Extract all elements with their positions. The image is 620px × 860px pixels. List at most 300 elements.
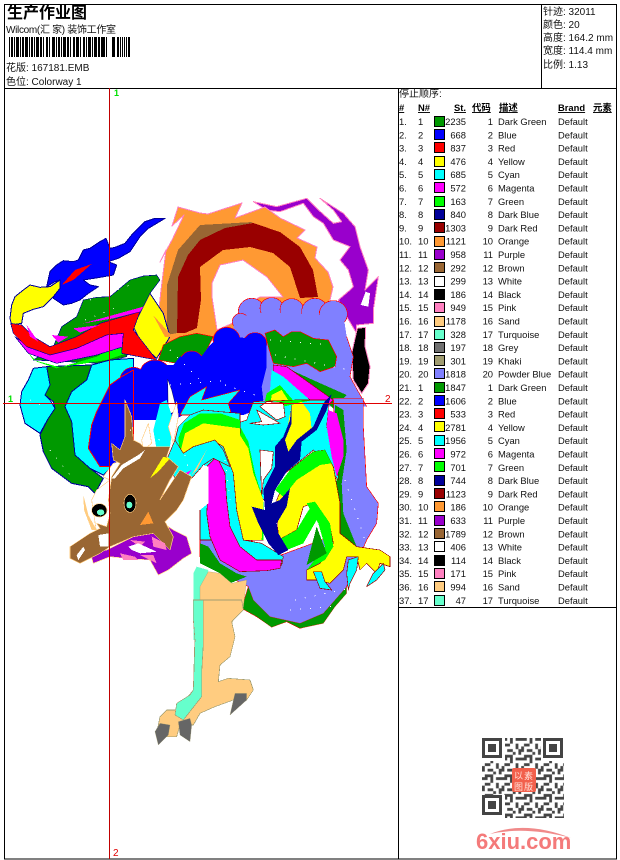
row 20: 20. <box>399 369 412 380</box>
row 31: 633 <box>450 515 466 526</box>
row 33: 406 <box>450 542 466 553</box>
row 5: 5. <box>399 169 407 180</box>
row 3: 3. <box>399 143 407 154</box>
row 8: 840 <box>450 209 466 220</box>
row 4 <box>399 156 588 167</box>
row 8 <box>399 209 588 220</box>
row 20: 20 <box>483 369 493 380</box>
row 12: 292 <box>450 262 466 273</box>
dragon body red and magenta stripes <box>11 307 157 368</box>
row 36: 36. <box>399 582 412 592</box>
row 1: 1 <box>418 116 423 127</box>
row 26: Default <box>558 448 588 460</box>
table header: 描述 <box>499 102 518 113</box>
yellow oval <box>133 293 170 358</box>
row 27: Green <box>498 462 524 473</box>
row 23 <box>399 408 588 420</box>
row 22: 1606 <box>445 395 466 406</box>
sand hind leg and foot <box>155 600 253 745</box>
row 24 <box>399 422 588 433</box>
row 10: Orange <box>498 236 529 247</box>
row 29: Dark Red <box>498 488 538 499</box>
row 5: 5 <box>488 169 493 180</box>
row 21: Default <box>558 382 588 393</box>
row 9 <box>399 222 588 233</box>
row 12: Default <box>558 262 588 273</box>
row 21: 1 <box>418 382 423 393</box>
row 19 <box>399 355 588 366</box>
row 28: 8 <box>488 475 493 486</box>
row 2: Blue <box>498 129 517 140</box>
title: 生产作业图 <box>7 4 87 22</box>
row 37: 47 <box>456 595 466 606</box>
row 12: 12 <box>483 262 493 273</box>
design file: 花版: 167181.EMB <box>6 61 90 74</box>
height: 高度: 164.2 mm <box>543 31 613 44</box>
row 17: 328 <box>450 329 466 340</box>
row 13: White <box>498 276 522 287</box>
row 34: 14 <box>418 555 428 566</box>
row 14: 14. <box>399 289 412 300</box>
row 17: Default <box>558 329 588 340</box>
row 3: 837 <box>450 143 466 154</box>
row 21: 21. <box>399 382 412 393</box>
row 27: 7 <box>418 462 423 473</box>
row 11: Default <box>558 249 588 260</box>
dragon embroidery design <box>10 198 390 745</box>
row 37: 17 <box>418 595 428 606</box>
row 6: Magenta <box>498 182 535 194</box>
row 16: Default <box>558 316 588 326</box>
row 14: 14 <box>483 289 493 300</box>
periwinkle-side dark green puff <box>265 330 337 372</box>
marker 1 left: 1 <box>8 394 13 404</box>
row 9: 9. <box>399 222 407 233</box>
row 5: Default <box>558 169 588 180</box>
row 3 <box>399 142 588 154</box>
row 3: Red <box>498 143 515 154</box>
black stitched strip <box>352 327 370 393</box>
table header: St. <box>454 102 466 113</box>
row 16: 16 <box>418 316 428 326</box>
row 27 <box>399 462 588 473</box>
row 31: 31. <box>399 515 412 526</box>
row 9: 9 <box>418 222 423 233</box>
colour count: 颜色: 20 <box>543 18 580 31</box>
row 26: 972 <box>450 448 466 460</box>
row 11: Purple <box>498 249 525 260</box>
row 25: 1956 <box>445 435 466 446</box>
row 26: 6 <box>488 448 493 460</box>
left cyan cloud <box>20 367 55 433</box>
row 37: 37. <box>399 595 412 606</box>
row 4: 4 <box>418 156 423 167</box>
row 14: 14 <box>418 289 428 300</box>
row 13: Default <box>558 276 588 287</box>
row 35: Pink <box>498 568 517 579</box>
row 30: Orange <box>498 502 529 513</box>
crosshair vertical line <box>108 88 110 859</box>
row 30 <box>399 502 588 513</box>
row 14: 186 <box>450 289 466 300</box>
row 1: Dark Green <box>498 116 546 127</box>
row 9: 9 <box>488 222 493 233</box>
row 26: Magenta <box>498 448 535 460</box>
marker 2 right: 2 <box>385 394 391 405</box>
row 32: 1789 <box>445 528 466 539</box>
row 20: 20 <box>418 369 428 380</box>
row 1: Default <box>558 116 588 127</box>
row 11: 11 <box>418 249 428 260</box>
row 17: 17 <box>483 329 493 340</box>
row 25: Default <box>558 435 588 446</box>
row 26: 6 <box>418 448 423 460</box>
row 33: 13 <box>483 542 493 553</box>
row 7: 7 <box>488 196 493 207</box>
row 5: 5 <box>418 169 423 180</box>
row 35: 171 <box>450 568 466 579</box>
row 14 <box>399 289 588 300</box>
table header: # <box>399 102 405 113</box>
row 1 <box>399 116 588 127</box>
barcode <box>9 37 130 57</box>
row 14: Default <box>558 289 588 300</box>
dark green mane <box>33 275 160 363</box>
row 20: 1818 <box>445 369 466 380</box>
row 16 <box>399 316 588 326</box>
row 21: 1847 <box>445 382 466 393</box>
row 36: Sand <box>498 582 520 592</box>
row 24: 2781 <box>445 422 466 433</box>
row 1: 2235 <box>445 116 466 127</box>
row 22: 22. <box>399 395 412 406</box>
row 8: 8 <box>488 209 493 220</box>
design stats <box>543 5 613 71</box>
row 36: 994 <box>450 582 466 592</box>
row 6: 6 <box>488 182 493 194</box>
colorway: 色位: Colorway 1 <box>6 75 82 88</box>
row 22 <box>399 395 588 406</box>
row 15: 949 <box>450 302 466 313</box>
row 33 <box>399 542 588 553</box>
row 3: 3 <box>418 143 423 154</box>
row 13: 13 <box>483 276 493 287</box>
row 31: Default <box>558 515 588 526</box>
row 19: 301 <box>450 355 466 366</box>
row 1: 1. <box>399 116 407 127</box>
row 29: 9 <box>488 488 493 499</box>
row 36 <box>399 582 588 592</box>
row 5: 685 <box>450 169 466 180</box>
row 7: Default <box>558 196 588 207</box>
row 35: 15 <box>418 568 428 579</box>
row 16: 16 <box>483 316 493 326</box>
row 10: 10 <box>483 236 493 247</box>
scale: 比例: 1.13 <box>543 58 588 71</box>
row 34: 114 <box>451 555 466 566</box>
row 12 <box>399 262 588 273</box>
row 11: 958 <box>450 249 466 260</box>
row 12: 12 <box>418 262 428 273</box>
row 32: Default <box>558 528 588 539</box>
row 16: Sand <box>498 316 520 326</box>
row 21 <box>399 382 588 393</box>
row 36: 16 <box>418 582 428 592</box>
row 7: 7 <box>418 196 423 207</box>
row 12: Brown <box>498 262 525 273</box>
row 28: Default <box>558 475 588 486</box>
row 20 <box>399 368 588 380</box>
row 18: 18 <box>418 342 428 353</box>
row 1: 1 <box>488 116 493 127</box>
upper rainbow band <box>200 400 343 540</box>
table header: 元素 <box>593 102 612 113</box>
row 23: Default <box>558 409 588 420</box>
row 37: Default <box>558 595 588 606</box>
green cloud <box>40 365 103 493</box>
QR seal: 版 <box>524 781 533 792</box>
row 10: 1121 <box>446 236 466 247</box>
row 18: 18. <box>399 342 412 353</box>
row 18: 197 <box>450 342 466 353</box>
row 37: 17 <box>483 595 493 606</box>
row 31: 11 <box>418 515 428 526</box>
row 33: 33. <box>399 542 412 553</box>
row 27: Default <box>558 462 588 473</box>
row 5 <box>399 169 588 180</box>
row 37: Turquoise <box>498 595 539 606</box>
row 15: 15 <box>418 302 428 313</box>
row 29 <box>399 488 588 499</box>
row 8: Dark Blue <box>498 209 539 220</box>
row 34: Black <box>498 555 521 566</box>
stitch count: 针迹: 32011 <box>543 5 596 18</box>
table header: 代码 <box>472 102 491 113</box>
row 8: 8 <box>418 209 423 220</box>
orange flame arc <box>155 203 333 345</box>
row 19: Default <box>558 355 588 366</box>
row 11 <box>399 249 588 260</box>
row 29: 29. <box>399 488 412 499</box>
row 11: 11. <box>399 249 411 260</box>
row 30: 30. <box>399 502 412 513</box>
row 13: 13. <box>399 276 412 287</box>
row 12: 12. <box>399 262 412 273</box>
row 17: 17 <box>418 329 428 340</box>
row 2: 2 <box>488 129 493 140</box>
row 21: Dark Green <box>498 382 546 393</box>
row 18: Grey <box>498 342 519 353</box>
row 35: Default <box>558 568 588 579</box>
row 24: 4 <box>418 422 423 433</box>
row 11: 11 <box>483 249 493 260</box>
row 15: Default <box>558 302 588 313</box>
row 10: Default <box>558 236 588 247</box>
row 18 <box>399 342 588 353</box>
row 15: Pink <box>498 302 517 313</box>
row 37 <box>399 595 588 606</box>
6xiu.com logo: 6xiu.com <box>476 829 571 854</box>
row 9: Dark Red <box>498 222 538 233</box>
row 33: Default <box>558 542 588 553</box>
row 36: Default <box>558 582 588 592</box>
row 22: 2 <box>488 395 493 406</box>
row 28: 744 <box>450 475 466 486</box>
row 24: Yellow <box>498 422 525 433</box>
row 17: 17. <box>399 329 412 340</box>
row 2: 668 <box>450 129 466 140</box>
row 20: Powder Blue <box>498 369 551 380</box>
row 32: 12 <box>483 528 493 539</box>
table header <box>399 102 612 113</box>
row 28 <box>399 475 588 486</box>
row 19: Khaki <box>498 355 521 366</box>
row 22: 2 <box>418 395 423 406</box>
width: 宽度: 114.4 mm <box>543 44 612 57</box>
row 5: Cyan <box>498 169 520 180</box>
row 31 <box>399 515 588 526</box>
row 6: 6. <box>399 182 407 194</box>
table header: Brand <box>558 102 585 113</box>
row 35: 35. <box>399 568 412 579</box>
QR code <box>482 738 564 818</box>
row 9: 1303 <box>445 222 466 233</box>
row 10 <box>399 236 588 247</box>
row 27: 701 <box>450 462 466 473</box>
row 30: 10 <box>483 502 493 513</box>
row 4: Yellow <box>498 156 525 167</box>
row 30: 10 <box>418 502 428 513</box>
row 31: 11 <box>483 515 493 526</box>
turquoise and sand leg upper <box>193 567 247 640</box>
row 25: 25. <box>399 435 412 446</box>
row 6: 6 <box>418 182 423 194</box>
row 31: Purple <box>498 515 525 526</box>
row 2: 2 <box>418 129 423 140</box>
row 15: 15 <box>483 302 493 313</box>
row 26: 26. <box>399 448 412 460</box>
rainbow continuation by the head <box>167 410 240 515</box>
row 18: 18 <box>483 342 493 353</box>
row 17: Turquoise <box>498 329 539 340</box>
row 23: 3 <box>488 409 493 420</box>
row 18: Default <box>558 342 588 353</box>
QR seal: 素 <box>524 770 533 781</box>
row 34: 34. <box>399 555 412 566</box>
row 16: 16. <box>399 316 412 326</box>
white arc centre <box>212 260 283 330</box>
crosshair horizontal line <box>3 402 392 404</box>
row 28: 8 <box>418 475 423 486</box>
row 2: 2. <box>399 129 407 140</box>
row 14: Black <box>498 289 521 300</box>
row 6: Default <box>558 182 588 194</box>
marker 2 bottom: 2 <box>113 848 119 859</box>
row 25: Cyan <box>498 435 520 446</box>
row 7 <box>399 196 588 207</box>
white stitch speckles <box>30 285 365 610</box>
row 28: 28. <box>399 475 412 486</box>
big blue puff <box>120 327 267 420</box>
row 23: Red <box>498 409 515 420</box>
QR seal <box>512 768 536 792</box>
row 10: 10. <box>399 236 412 247</box>
blue flame <box>47 218 165 305</box>
row 25: 5 <box>488 435 493 446</box>
navy flame <box>252 394 332 555</box>
row 13: 299 <box>450 276 466 287</box>
row 22: Blue <box>498 395 517 406</box>
row 13 <box>399 276 588 287</box>
row 10: 10 <box>418 236 428 247</box>
row 32: 12 <box>418 528 428 539</box>
row 27: 7 <box>488 462 493 473</box>
row 32: Brown <box>498 528 525 539</box>
orange inner slash <box>153 315 173 337</box>
row 7: 7. <box>399 196 407 207</box>
QR seal: 图 <box>514 782 523 792</box>
row 19: 19 <box>483 355 493 366</box>
row 24: Default <box>558 422 588 433</box>
brown arc band <box>167 222 253 335</box>
row 3: 3 <box>488 143 493 154</box>
row 19: 19 <box>418 355 428 366</box>
row 28: Dark Blue <box>498 475 539 486</box>
row 6: 572 <box>450 182 466 194</box>
row 34: 14 <box>483 555 493 566</box>
row 24: 24. <box>399 422 412 433</box>
hind leg and claws <box>275 450 390 590</box>
row 19: 19. <box>399 355 412 366</box>
blue lobe beside the head <box>88 370 133 467</box>
yellow snout plume <box>10 280 60 325</box>
table header: N# <box>418 102 431 113</box>
row 15: 15. <box>399 302 412 313</box>
row 36: 16 <box>483 582 493 592</box>
row 23: 3 <box>418 409 423 420</box>
row 20: Default <box>558 369 588 380</box>
row 7: 163 <box>450 196 466 207</box>
periwinkle cloud upper <box>232 298 367 407</box>
row 4: 476 <box>450 156 466 167</box>
row 29: Default <box>558 488 588 499</box>
row 9: Default <box>558 222 588 233</box>
green puff behind blue <box>158 333 213 363</box>
row 8: 8. <box>399 209 407 220</box>
row 4: 4. <box>399 156 407 167</box>
row 33: White <box>498 542 522 553</box>
row 4: Default <box>558 156 588 167</box>
row 25 <box>399 435 588 446</box>
row 30: Default <box>558 502 588 513</box>
row 13: 13 <box>418 276 428 287</box>
left clouds <box>20 358 133 493</box>
right cyan cloud <box>65 358 133 475</box>
QR seal: 以 <box>514 771 523 781</box>
company line: Wilcom(汇 家) 装饰工作室 <box>6 23 116 36</box>
row 27: 27. <box>399 462 412 473</box>
row 4: 4 <box>488 156 493 167</box>
row 34: Default <box>558 555 588 566</box>
row 16: 1178 <box>446 316 466 326</box>
main body rainbow <box>200 413 283 583</box>
row 26 <box>399 448 588 460</box>
row 6 <box>399 182 588 194</box>
row 23: 533 <box>450 409 466 420</box>
row 34 <box>399 555 588 566</box>
row 23: 23. <box>399 409 412 420</box>
dark red arc band <box>177 223 318 333</box>
